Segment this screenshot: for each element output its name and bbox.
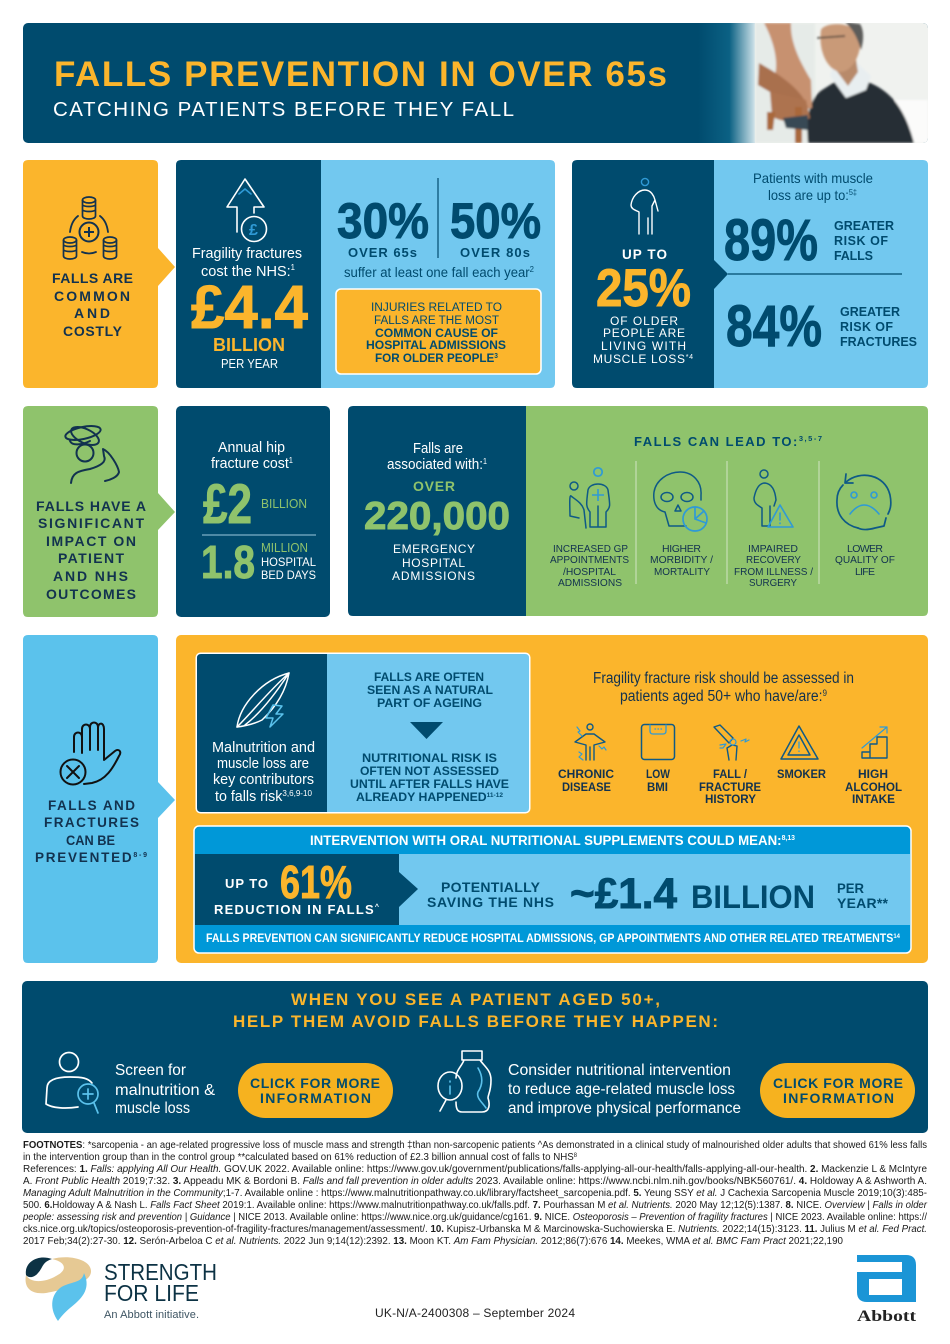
panel: muscle loss prevalence (572, 160, 714, 388)
logo: Strength for Life: An Abbott initiative. (104, 1309, 199, 1321)
logo: Abbott (857, 1255, 917, 1325)
icon: older person with cane (631, 178, 658, 234)
callout: injuries: INJURIES RELATED TO (371, 300, 502, 314)
text: nutritional risk not assessed: ALREADY HAPPENED (356, 790, 486, 804)
heading: CAN BE (66, 833, 115, 848)
item: low BMI: BMI (647, 782, 668, 794)
panel: hip fracture cost (176, 406, 330, 617)
text: nutritional risk not assessed (350, 751, 509, 804)
stat: £4.4 billion: £4.4 (191, 273, 308, 341)
text: fragility fracture risk: 9 (822, 688, 827, 698)
text: consider nutritional intervention: and improve physical performance (508, 1100, 741, 1117)
icon: dizzy person (64, 423, 119, 483)
text: consider nutritional intervention (508, 1062, 741, 1117)
stat: 25% with muscle loss: LIVING WITH (601, 339, 686, 353)
stat: savings to the NHS: ~£1.4 (570, 870, 677, 918)
heading: FRACTURES (44, 815, 139, 830)
text: malnutrition: to falls risk (215, 788, 286, 805)
heading: FALLS HAVE A (36, 498, 146, 514)
heading: FALLS AND (48, 798, 135, 813)
text: fragility fracture risk: patients aged 50+ who have/are: (620, 688, 845, 705)
item: increased GP appointments: APPOINTMENTS (550, 554, 629, 566)
stat: 25% with muscle loss (593, 247, 693, 366)
text: emergency hospital admissions (392, 542, 475, 583)
text: nutritional risk not assessed: OFTEN NOT ASSESSED (360, 764, 499, 778)
text: fragility fractures cost: 1 (291, 263, 296, 272)
item: fall / fracture history: HISTORY (705, 794, 756, 806)
text: natural part of ageing: PART OF AGEING (377, 696, 482, 710)
text: emergency hospital admissions: EMERGENCY (393, 542, 475, 556)
item: fall / fracture history: FALL / (713, 769, 748, 781)
text: malnutrition: muscle loss are (217, 755, 309, 772)
panel: NHS cost of fragility fractures (176, 160, 321, 388)
stat: 84% fractures: 84% (726, 294, 822, 359)
stat: 1.8 million bed days: 1.8 (201, 536, 255, 588)
text: emergency hospital admissions: ADMISSIONS (392, 569, 475, 583)
stat: over 220,000 (364, 478, 510, 538)
subtitle: CATCHING PATIENTS BEFORE THEY FALL (53, 98, 514, 121)
panel: risk with muscle loss (714, 160, 928, 388)
icon: muscle with lightning bolt (237, 673, 289, 727)
icon: person with magnifier (46, 1052, 98, 1113)
stat: £2 billion (203, 472, 307, 535)
stat: 25% with muscle loss: OF OLDER (610, 314, 678, 328)
item: chronic disease: DISEASE (562, 782, 611, 794)
text: annual hip fracture cost: 1 (289, 456, 294, 465)
panel: fall prevalence by age (321, 160, 555, 388)
stat: 1.8 million bed days: MILLION (261, 541, 308, 555)
stat: £2 billion: £2 (203, 472, 252, 535)
footnotes and references: A. Front Public Health 2019;7:32. 3. Appeadu MK & Bordoni B. Falls and fall prevention in older adults 2023. Available online: https://www.ncbi.nlm.nih.gov/books/NBK560761/. 4. Holdoway A & Ashworth A. (23, 1176, 927, 1187)
footnotes and references: 2017 Feb;34(2):27-30. 12. Serón-Arbeloa C et al. Nutrients. 2022 Jun 9;14(12):2392. 13. Moon KT. Am Fam Physician. 2012;86(7):676 14. Meekes, WMA et al. BMC Fam Pract 2021;22,190 (23, 1236, 843, 1247)
panel: call to action (22, 981, 928, 1133)
footnotes and references: cks.nice.org.uk/topics/osteoporosis-prevention-of-fragility-fractures/management/assessment/. 10. Kupisz-Urbanska M & Marcinowska-Suchowierska E. Nutrients. 2022;14(15):3123. 11. Julius M et al. Fed Pract. (23, 1224, 927, 1235)
item: higher morbidity / mortality: HIGHER (662, 543, 701, 555)
stat: 25% with muscle loss: MUSCLE LOSS (593, 352, 685, 366)
item: impaired recovery: FROM ILLNESS / (734, 566, 813, 578)
stat: 61% reduction in falls (195, 854, 418, 925)
stat: 25% with muscle loss: UP TO (622, 247, 667, 262)
stat: 50% over 80s: OVER 80s (460, 245, 530, 260)
caption: 2 (530, 265, 535, 274)
item: higher morbidity / mortality: MORBIDITY / (650, 554, 713, 566)
item: increased GP appointments: INCREASED GP (553, 543, 628, 555)
intro text: 5‡ (849, 188, 857, 197)
text: natural part of ageing: SEEN AS A NATURAL (367, 683, 494, 697)
heading: WHEN YOU SEE A PATIENT AGED 50+, (291, 990, 660, 1009)
button: click for more information: INFORMATION (783, 1090, 894, 1106)
text: emergency hospital admissions: HOSPITAL (402, 556, 465, 570)
icon: upward arrow with pound coin (227, 179, 266, 242)
stat: 89% falls: FALLS (834, 249, 873, 263)
panel: falls can lead to (526, 406, 928, 616)
intro text: Patients with muscle (753, 170, 873, 186)
stat: over 220,000: OVER (413, 478, 455, 494)
callout: injuries: HOSPITAL ADMISSIONS (366, 338, 506, 352)
item: smoker (777, 726, 827, 781)
item: lower quality of life (835, 474, 895, 578)
text: annual hip fracture cost: Annual hip (218, 439, 285, 456)
heading: 3,5-7 (799, 434, 822, 443)
stat: 61% reduction in falls: 61% (280, 856, 352, 908)
strip heading: INTERVENTION WITH ORAL NUTRITIONAL SUPPLEMENTS COULD MEAN: (310, 833, 790, 848)
footnotes and references: References: 1. Falls: applying All Our Health. GOV.UK 2022. Available online: https://www.gov.uk/government/publications/falls-applying-all-our-health/falls-applying-all-our-health. 2. Mackenzie L & McIntyre (23, 1164, 927, 1175)
box: malnutrition and muscle loss (196, 652, 530, 814)
heading: IMPACT ON (46, 533, 136, 549)
text: nutritional risk not assessed: UNTIL AFTER FALLS HAVE (350, 777, 509, 791)
text: falls are associated with: Falls are (413, 440, 463, 457)
stat: savings to the NHS: SAVING THE NHS (427, 894, 554, 910)
heading (35, 798, 147, 865)
stat: 30% over 65s: 30% (337, 193, 429, 249)
item: impaired recovery: IMPAIRED (748, 543, 798, 555)
icon: hand with stop cross (60, 722, 120, 784)
icon: upward arrow with pound coin: £ (249, 222, 258, 239)
header banner (23, 22, 928, 143)
item: impaired recovery: RECOVERY (746, 554, 801, 566)
callout: injuries: FOR OLDER PEOPLE (375, 351, 501, 365)
item: lower quality of life: LOWER (847, 543, 883, 555)
stat: £4.4 billion: BILLION (213, 335, 285, 355)
stat: 61% reduction in falls: REDUCTION IN FALLS (214, 902, 374, 917)
text: annual hip fracture cost (211, 439, 294, 472)
footnotes and references: FOOTNOTES: *sarcopenia - an age-related progressive loss of muscle mass and strength ‡than non-sarcopenic patients ^As demonstrated in a clinical study of malnourished older adults that showed 61% less falls (23, 1140, 927, 1151)
item: high alcohol intake: HIGH (858, 769, 888, 781)
text: nutritional risk not assessed: NUTRITIONAL RISK IS (362, 751, 497, 765)
footnotes and references: 500. 6.Holdoway A & Nash L. Falls Fact Sheet 2019:1. Available online: https://www.malnutritionpathway.co.uk/falls.pdf. 7. Pourhassan M et al. Nutrients. 2020 May 12;12(5):1387. 8. NICE. Overview | Falls in older (23, 1200, 928, 1211)
heading: OUTCOMES (46, 586, 136, 602)
text: screen for malnutrition (115, 1062, 216, 1117)
item: chronic disease: CHRONIC (558, 769, 614, 781)
stat: 89% falls: RISK OF (834, 234, 888, 248)
intro text (753, 170, 873, 203)
heading (233, 990, 718, 1031)
text: falls are associated with: 1 (483, 457, 487, 466)
stat: 1.8 million bed days (201, 536, 316, 588)
button: click for more information: INFORMATION (260, 1090, 371, 1106)
heading: FALLS ARE (52, 270, 133, 286)
heading: PREVENTED (35, 850, 132, 865)
text: screen for malnutrition: malnutrition & (115, 1082, 216, 1099)
stat: 30% over 65s: OVER 65s (348, 245, 417, 260)
stat: £2 billion: BILLION (261, 497, 307, 511)
item: higher morbidity / mortality: MORTALITY (654, 566, 710, 578)
caption: suffer at least one fall each year (344, 265, 535, 280)
item: fall / fracture history (699, 725, 761, 806)
callout: injuries: 3 (494, 353, 498, 360)
text: falls are associated with (387, 440, 487, 473)
text: per year: PER YEAR (221, 356, 278, 371)
footnotes and references: people: assessing risk and prevention | Guidance | NICE 2013. Available online: https://www.nice.org.uk/guidance/cg161. 9. NICE. Osteoporosis – Prevention of fragility fractures | NICE 2023. Available online: https:// (22, 1212, 927, 1223)
stat: 1.8 million bed days: HOSPITAL (261, 555, 316, 569)
stat: 89% falls: GREATER (834, 219, 894, 233)
stat: 1.8 million bed days: BED DAYS (261, 568, 316, 582)
item: high alcohol intake (845, 727, 902, 806)
arrow: down triangle (410, 722, 443, 739)
heading: COMMON (54, 288, 130, 304)
panel: falls have a significant impact (23, 406, 175, 617)
document code: UK-N/A-2400308 – September 2024 (375, 1306, 575, 1320)
text: fragility fractures cost: cost the NHS: (201, 263, 294, 280)
strip footer: 14 (893, 933, 900, 940)
item: low BMI: LOW (646, 769, 670, 781)
text: falls are associated with: associated with: (387, 456, 494, 473)
text: annual hip fracture cost: fracture cost (211, 455, 294, 472)
text: fragility fracture risk: Fragility fracture risk should be assessed in (593, 670, 854, 687)
intro text: loss are up to: (768, 187, 856, 203)
stat: savings to the NHS: PER (837, 881, 864, 896)
heading: 8-9 (133, 852, 147, 859)
stat: 89% falls: 89% (724, 208, 818, 273)
strip footer: FALLS PREVENTION CAN SIGNIFICANTLY REDUCE HOSPITAL ADMISSIONS, GP APPOINTMENTS AND OTHER RELATED TREATMENTS (206, 933, 950, 945)
stat: savings to the NHS: YEAR** (837, 895, 889, 911)
text: screen for malnutrition: muscle loss (115, 1100, 190, 1117)
text: nutritional risk not assessed: 11-12 (487, 792, 503, 799)
heading (52, 270, 133, 339)
stat: 61% reduction in falls: UP TO (225, 876, 268, 891)
footnotes and references: in the intervention group than in the control group **calculated based on 61% reduction of £2.3 billion annual cost of falls to NHS (23, 1152, 589, 1163)
callout: injuries (336, 289, 541, 374)
stat: 61% reduction in falls: ^ (375, 903, 379, 911)
item: fall / fracture history: FRACTURE (699, 782, 761, 794)
stat: 84% fractures: FRACTURES (840, 335, 917, 349)
header photo: carer's hand on older man's cane (698, 22, 928, 143)
item: high alcohol intake: ALCOHOL (845, 782, 902, 794)
text: natural part of ageing (367, 670, 494, 710)
stat: savings to the NHS: POTENTIALLY (441, 879, 541, 895)
item: increased GP appointments: ADMISSIONS (558, 577, 622, 589)
item: smoker: SMOKER (777, 769, 827, 781)
text: malnutrition: key contributors (213, 771, 314, 788)
stat: 50% over 80s: 50% (450, 193, 541, 249)
stat: 25% with muscle loss: 25% (596, 259, 691, 318)
button: click for more information (760, 1063, 915, 1118)
stat: savings to the NHS: BILLION (691, 879, 815, 915)
panel: emergency admissions (348, 406, 526, 616)
text: fragility fracture risk (593, 670, 854, 705)
item: impaired recovery (734, 470, 813, 589)
footnotes and references: Managing Adult Malnutrition in the Community;1-7. Available online : https://www.malnutritionpathway.co.uk/library/factsheet_sarcopenia.pdf. 5. Yeung SSY et al. J Cachexia Sarcopenia Muscle 2019;10(3):485- (23, 1188, 927, 1199)
item: chronic disease (558, 724, 614, 794)
stat: 84% fractures (726, 294, 917, 359)
heading (36, 498, 146, 602)
footnotes and references: 8 (574, 1153, 578, 1159)
text: malnutrition: 3,6,9-10 (282, 788, 312, 798)
stat: savings to the NHS (427, 870, 889, 918)
button: click for more information: CLICK FOR MORE (773, 1075, 903, 1091)
logo: Strength for Life (26, 1257, 217, 1321)
text: screen for malnutrition: Screen for (115, 1062, 186, 1079)
button: click for more information (238, 1063, 393, 1118)
title: FALLS PREVENTION IN OVER 65s (54, 55, 667, 94)
logo: Strength for Life: STRENGTH (104, 1259, 217, 1285)
heading: COSTLY (63, 323, 123, 339)
logo: Abbott: Abbott (857, 1308, 917, 1325)
stat: 89% falls (724, 208, 894, 273)
button: click for more information: CLICK FOR MORE (250, 1075, 380, 1091)
item: lower quality of life: LIFE (855, 566, 875, 578)
item: higher morbidity / mortality (650, 472, 713, 578)
item: low BMI (642, 724, 674, 794)
heading: AND (74, 305, 110, 321)
panel: falls are common and costly (23, 160, 175, 388)
footnotes and references (22, 1140, 928, 1247)
heading: AND NHS (53, 568, 128, 584)
text: consider nutritional intervention: Consider nutritional intervention (508, 1062, 731, 1079)
item: increased GP appointments (550, 468, 629, 589)
item: high alcohol intake: INTAKE (852, 794, 895, 806)
stat: over 220,000: 220,000 (364, 495, 510, 538)
stat: 84% fractures: GREATER (840, 305, 900, 319)
panel: orange prevention panel (176, 635, 928, 963)
icon: coins around a plus (64, 197, 116, 259)
text: malnutrition (212, 739, 315, 805)
item: lower quality of life: QUALITY OF (835, 554, 895, 566)
strip heading: 8,13 (782, 835, 795, 842)
box: oral nutritional supplements (194, 826, 911, 953)
text: consider nutritional intervention: to reduce age-related muscle loss (508, 1081, 735, 1098)
heading: PATIENT (58, 550, 124, 566)
text: natural part of ageing: FALLS ARE OFTEN (374, 670, 484, 684)
text: fragility fractures cost: Fragility fractures (192, 245, 302, 262)
item: increased GP appointments: /HOSPITAL (563, 566, 616, 578)
heading: SIGNIFICANT (38, 515, 144, 531)
heading: HELP THEM AVOID FALLS BEFORE THEY HAPPEN: (233, 1012, 718, 1031)
stat: 25% with muscle loss: *4 (686, 354, 693, 361)
text: fragility fractures cost (192, 245, 302, 280)
item: impaired recovery: SURGERY (749, 577, 797, 589)
callout: injuries: FALLS ARE THE MOST (374, 313, 499, 327)
heading: FALLS CAN LEAD TO: (634, 434, 797, 449)
stat: 25% with muscle loss: PEOPLE ARE (603, 326, 685, 340)
panel: falls and fractures can be prevented (23, 635, 175, 963)
callout: injuries: COMMON CAUSE OF (375, 326, 498, 340)
logo: Strength for Life: FOR LIFE (104, 1280, 199, 1306)
stat: 84% fractures: RISK OF (840, 320, 893, 334)
text: malnutrition: Malnutrition and (212, 739, 315, 756)
icon: bottle with magnifier (438, 1051, 491, 1112)
